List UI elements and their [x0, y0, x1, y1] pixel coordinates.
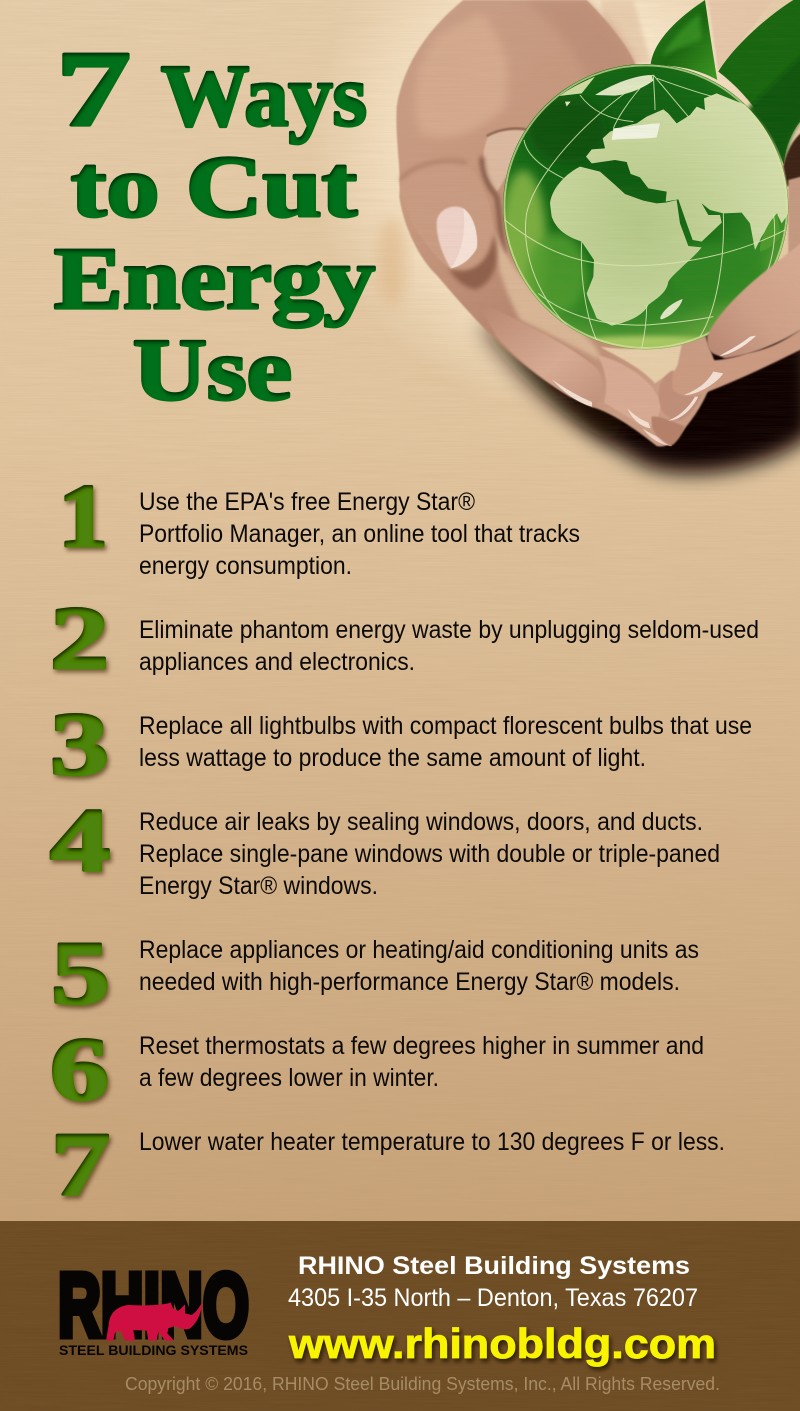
- left hand silhouette: [396, 0, 717, 446]
- finger behind thumb: [483, 130, 527, 192]
- logo subtitle: STEEL BUILDING SYSTEMS: [59, 1342, 248, 1358]
- item 2: [50, 589, 759, 688]
- item 5 text: Replace appliances or heating/aid conditioning units as: [139, 936, 699, 964]
- item 1 text: [139, 488, 580, 580]
- number 1: 1: [58, 467, 108, 566]
- footer band: [0, 1221, 800, 1411]
- thumb nail: [437, 207, 477, 268]
- globe rim light: [504, 65, 787, 348]
- item 3: [50, 695, 752, 794]
- land: Africa: [550, 167, 702, 326]
- number 4: 4: [50, 791, 110, 890]
- dark gap right of globe: [783, 127, 800, 187]
- item 1: [58, 467, 580, 580]
- title line: Use: Use: [133, 322, 292, 419]
- second finger: [597, 355, 661, 428]
- palm strip beside globe: [495, 230, 600, 360]
- title line: to Cut: to Cut: [71, 139, 357, 236]
- item 4 text: Replace single-pane windows with double or triple-paned: [139, 840, 720, 868]
- item 6 text: Reset thermostats a few degrees higher in summer and: [139, 1032, 704, 1060]
- copyright: Copyright © 2016, RHINO Steel Building Systems, Inc., All Rights Reserved.: [125, 1374, 720, 1394]
- back of hand highlight: [415, 13, 508, 137]
- number 7: 7: [51, 1115, 110, 1214]
- item 5 text: needed with high-performance Energy Star® models.: [139, 968, 680, 996]
- item 3 text: Replace all lightbulbs with compact florescent bulbs that use: [139, 712, 752, 740]
- number 3: 3: [50, 695, 109, 794]
- item 1 text: Portfolio Manager, an online tool that tracks: [139, 520, 580, 548]
- globe inner highlights: [500, 170, 547, 323]
- item 1 text: Use the EPA's free Energy Star®: [139, 488, 476, 516]
- title line: 7 Ways: 7: [56, 30, 131, 149]
- address: 4305 I-35 North – Denton, Texas 76207: [288, 1284, 698, 1312]
- glow under globe: [600, 345, 682, 383]
- crease above finger: [487, 128, 527, 136]
- shadow under hands: [520, 333, 800, 473]
- title line: 7 Ways: Ways: [161, 48, 367, 145]
- top right finger: [707, 233, 800, 358]
- item 4 text: Reduce air leaks by sealing windows, doors, and ducts.: [139, 808, 703, 836]
- item 5 text: [139, 936, 699, 996]
- item 4: [50, 791, 720, 900]
- leaves: [651, 0, 800, 165]
- item 6: [50, 1020, 704, 1119]
- website: www.rhinobldg.com: [288, 1320, 716, 1367]
- land: Eurasia: [586, 93, 800, 250]
- item 4 text: Energy Star® windows.: [139, 872, 378, 900]
- third right finger: [659, 370, 703, 420]
- thumb: [399, 155, 494, 271]
- item 7 text: Lower water heater temperature to 130 degrees F or less.: [139, 1128, 725, 1156]
- finger nails: [719, 336, 756, 356]
- land: Southeast Asia: [760, 213, 781, 252]
- item 3 text: [139, 712, 752, 772]
- title line: Energy: Energy: [54, 231, 375, 328]
- photo: hands holding green glass globe: [310, 0, 800, 473]
- item 1 text: energy consumption.: [139, 552, 352, 580]
- title: [54, 30, 375, 419]
- graticule lines: [505, 75, 785, 348]
- globe: [500, 64, 800, 351]
- logo wordmark: RHINO: [58, 1256, 249, 1356]
- item 2 text: Eliminate phantom energy waste by unplugging seldom-used: [139, 616, 759, 644]
- item 6 text: [139, 1032, 704, 1092]
- arm behind globe: [708, 0, 773, 72]
- number 5: 5: [51, 924, 110, 1023]
- number 2: 2: [50, 589, 109, 688]
- right hand fingers: [651, 233, 800, 446]
- item 2 text: appliances and electronics.: [139, 648, 415, 676]
- land: Madagascar: [660, 299, 683, 319]
- title line: 7 Ways: [56, 30, 367, 149]
- company name: RHINO Steel Building Systems: [298, 1252, 690, 1280]
- left hand: [396, 0, 717, 446]
- item 2 text: [139, 616, 759, 676]
- item 5: [51, 924, 699, 1023]
- item 3 text: less wattage to produce the same amount of light.: [139, 744, 646, 772]
- photo backdrop glow: [310, 0, 800, 410]
- logo: RHINO Steel Building Systems: [58, 1256, 249, 1358]
- lower finger: [477, 302, 603, 407]
- number 6: 6: [50, 1020, 109, 1119]
- right hand background: [788, 173, 800, 257]
- logo rhino silhouette: [106, 1301, 203, 1341]
- lowest right finger: [651, 416, 685, 446]
- item 6 text: a few degrees lower in winter.: [139, 1064, 439, 1092]
- second right finger: [672, 320, 800, 396]
- land: Greenland: [595, 75, 653, 96]
- item 4 text: [139, 808, 720, 900]
- item 7: [51, 1115, 725, 1214]
- land: snow highlights Scandinavia: [612, 123, 660, 140]
